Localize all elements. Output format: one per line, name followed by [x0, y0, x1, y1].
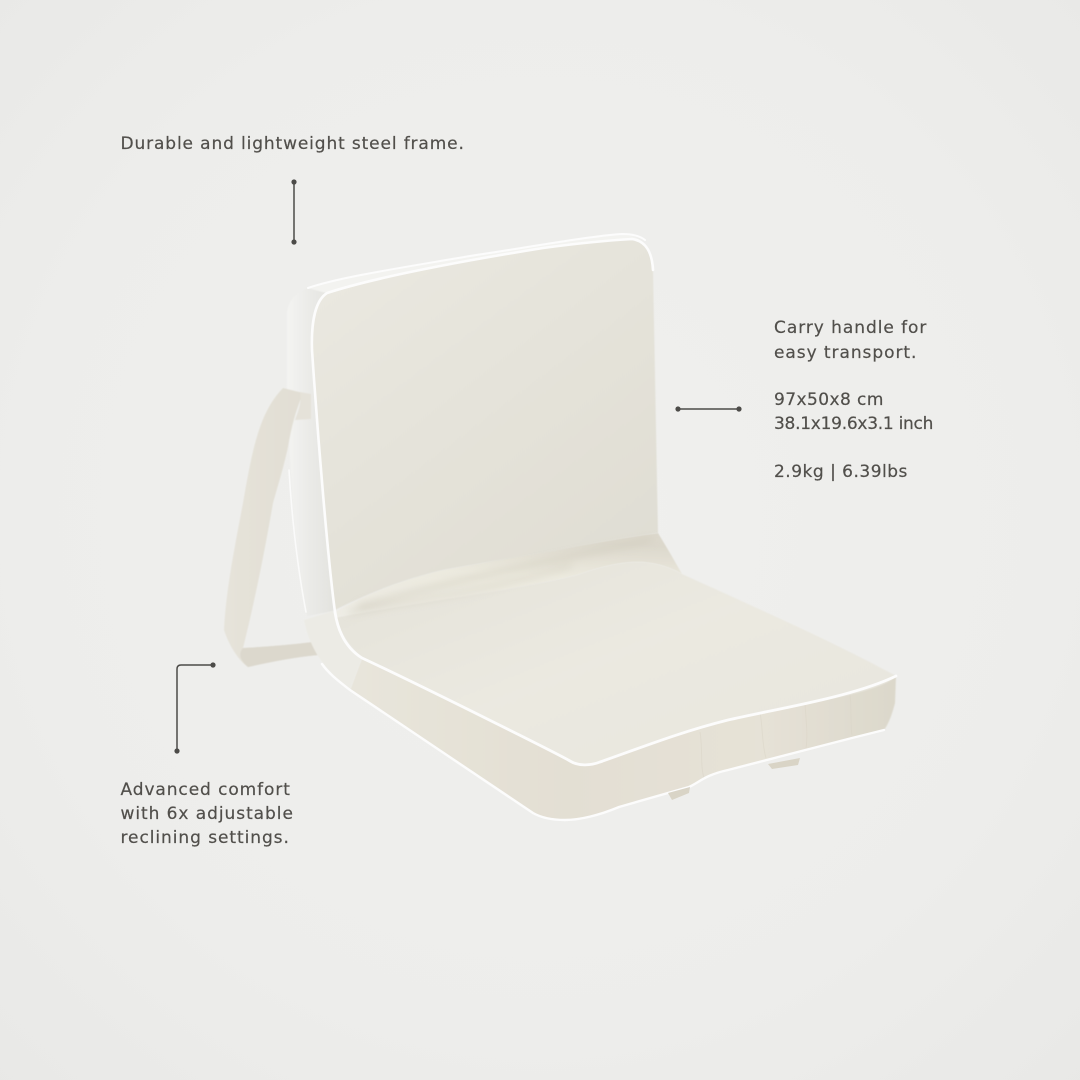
text: dimensions: 38.1x19.6x3.1 inch [774, 414, 934, 434]
front edge wrinkles [700, 695, 852, 778]
text: carry handle: easy transport. [774, 343, 917, 363]
heading text: steel frame: Durable and lightweight steel frame. [120, 134, 464, 154]
seat feet [668, 758, 800, 800]
fold under backrest [335, 533, 682, 620]
leader line: reclining settings [174, 662, 216, 754]
left hinge gusset [304, 611, 362, 690]
carry strap [224, 388, 318, 667]
callout: carry handle and specifications [675, 318, 934, 482]
seat cushion top surface [335, 562, 896, 765]
backrest top band [308, 234, 654, 293]
product image: reclining seat [224, 234, 896, 820]
seat cushion front edge [350, 658, 896, 820]
seat piping [322, 612, 896, 820]
text: reclining settings: reclining settings. [120, 828, 290, 848]
text: dimensions [774, 390, 934, 434]
leader line: carry handle [675, 406, 742, 412]
backrest front panel [312, 240, 658, 610]
fold shading [350, 540, 650, 612]
callout: steel frame [120, 134, 464, 245]
text: carry handle [774, 318, 927, 363]
backrest piping [289, 234, 653, 612]
callout: reclining settings [120, 662, 294, 848]
backrest side panel [287, 288, 334, 616]
text: reclining settings: Advanced comfort [120, 780, 290, 800]
leader line: steel frame [291, 179, 297, 245]
text: carry handle: Carry handle for [774, 318, 927, 338]
text: reclining settings: with 6x adjustable [120, 804, 294, 824]
text: dimensions: 97x50x8 cm [774, 390, 884, 410]
text: reclining settings [120, 780, 294, 848]
text: weight: 2.9kg | 6.39lbs [774, 462, 908, 482]
